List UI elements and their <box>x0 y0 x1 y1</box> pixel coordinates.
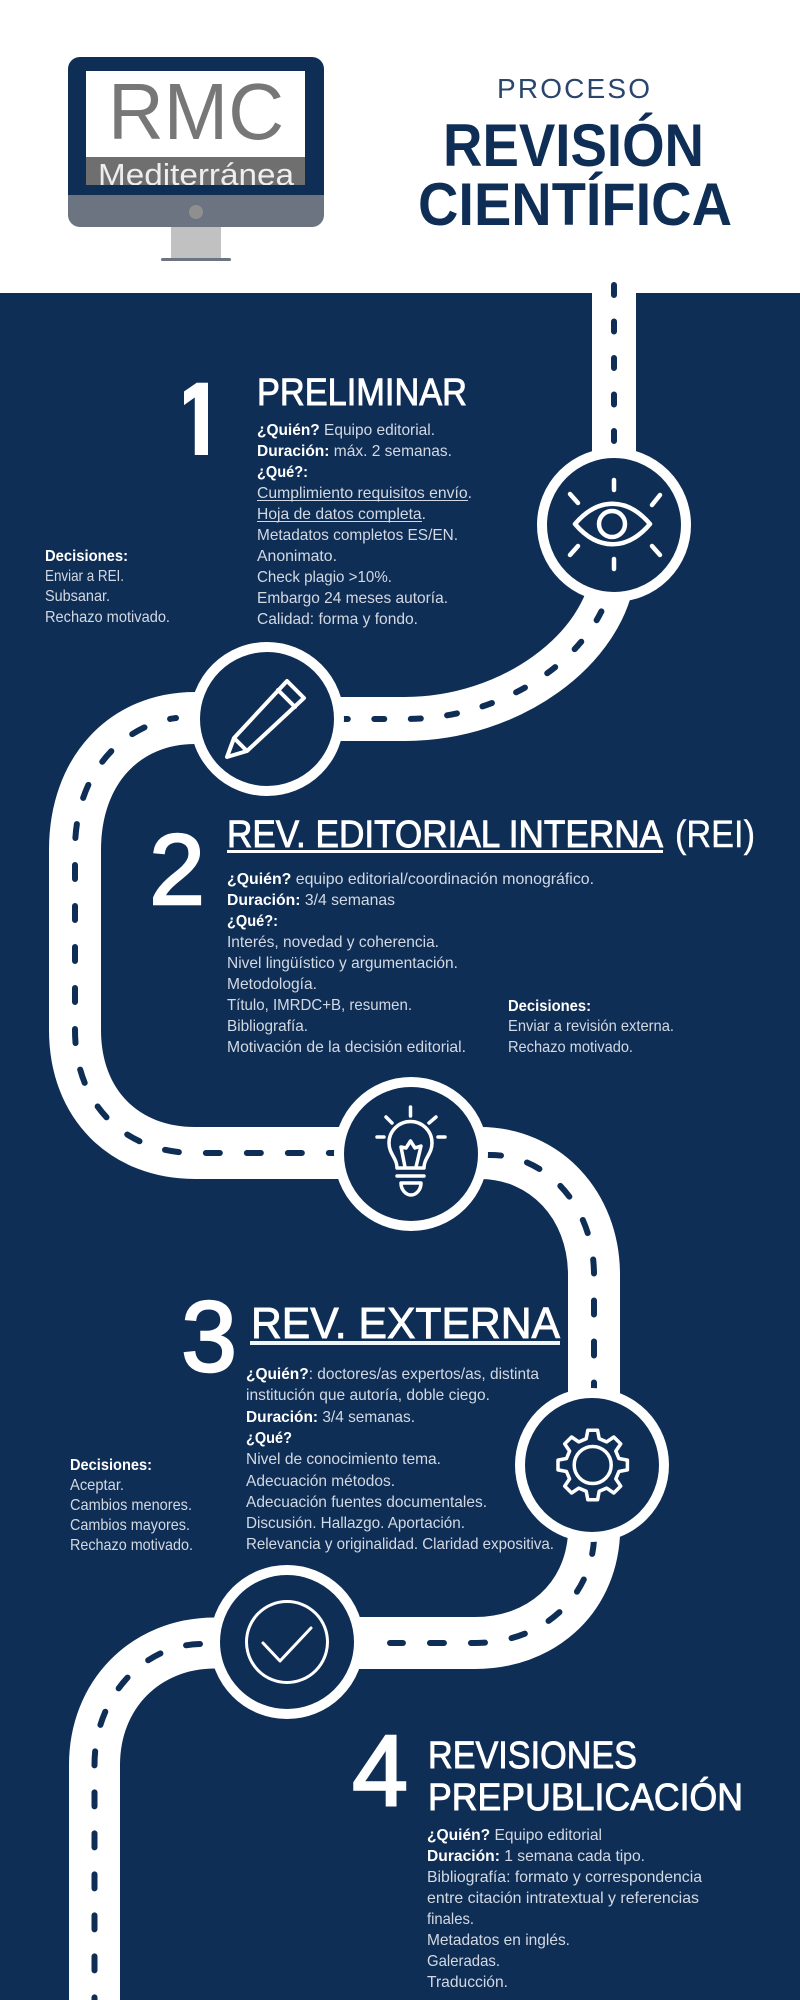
decisions: step 2: Rechazo motivado. <box>508 1039 633 1056</box>
body text: step 2: Metodología. <box>227 976 317 993</box>
body text: step 2: Título, IMRDC+B, resumen. <box>227 997 412 1014</box>
heading: rev. editorial interna: (REI) <box>675 814 755 856</box>
body text: step 1: ¿Quién? Equipo editorial. <box>257 422 435 439</box>
body text: step 3 <box>246 1366 554 1553</box>
body text: step 3: Adecuación métodos. <box>246 1473 395 1490</box>
body text: step 2: Nivel lingüístico y argumentación. <box>227 955 458 972</box>
icon: gear <box>520 1393 664 1537</box>
icon: pencil <box>195 647 339 791</box>
panel: step 2 revisión editorial interna <box>149 814 755 1056</box>
body text: step 4: Galeradas. <box>427 1953 500 1970</box>
decisions: step 2 <box>508 998 674 1056</box>
decisions: step 3: Decisiones: <box>70 1457 152 1474</box>
heading: revisiones prepublicación: REVISIONES <box>428 1735 637 1777</box>
body text: step 3: Relevancia y originalidad. Claridad expositiva. <box>246 1536 554 1553</box>
heading: rev. editorial interna: REV. EDITORIAL INTERNA <box>227 814 664 856</box>
decisions: step 1: Enviar a REI. <box>45 568 124 585</box>
road: winding path <box>75 270 614 2000</box>
decisions: step 2: Decisiones: <box>508 998 591 1015</box>
decisions: step 1: Decisiones: <box>45 548 128 565</box>
panel: step 3 revisión externa <box>181 1281 561 1553</box>
body text: step 1: Metadatos completos ES/EN. <box>257 527 458 544</box>
body text: step 1: Embargo 24 meses autoría. <box>257 590 448 607</box>
number 4: 4 <box>352 1715 408 1827</box>
icon: eye <box>542 453 686 597</box>
number 1: 1 <box>166 358 233 494</box>
body text: step 4: Duración: 1 semana cada tipo. <box>427 1848 645 1865</box>
decisions: step 1: Subsanar. <box>45 588 110 605</box>
body text: step 3: ¿Qué? <box>246 1430 292 1447</box>
title <box>418 73 732 238</box>
panel: step 4 revisiones prepublicación <box>352 1715 743 1991</box>
body text: step 1: Check plagio >10%. <box>257 569 392 586</box>
decisions: step 1 <box>45 548 170 626</box>
number 3: 3 <box>181 1281 237 1393</box>
body text: step 1: Calidad: forma y fondo. <box>257 611 418 628</box>
body text: step 1: Duración: máx. 2 semanas. <box>257 443 452 460</box>
body text: step 3: Discusión. Hallazgo. Aportación. <box>246 1515 465 1532</box>
title: CIENTÍFICA <box>418 171 732 238</box>
logo: RMC Mediterránea monitor: Mediterránea <box>98 157 295 192</box>
body text: step 3: Nivel de conocimiento tema. <box>246 1451 441 1468</box>
logo: RMC Mediterránea monitor: RMC <box>108 67 284 156</box>
body text: step 3: institución que autoría, doble ciego. <box>246 1387 490 1404</box>
body text: step 3: Duración: 3/4 semanas. <box>246 1409 415 1426</box>
body text: step 1: ¿Qué?: <box>257 464 308 481</box>
icon: light bulb <box>339 1082 483 1226</box>
body text: step 2: Duración: 3/4 semanas <box>227 892 395 909</box>
heading: preliminar: PRELIMINAR <box>257 372 467 414</box>
decisions: step 3: Rechazo motivado. <box>70 1537 193 1554</box>
body text: step 2: Bibliografía. <box>227 1018 308 1035</box>
body text: step 4: ¿Quién? Equipo editorial <box>427 1827 602 1844</box>
body text: step 2: Motivación de la decisión editorial. <box>227 1039 466 1056</box>
body text: step 3: ¿Quién?: doctores/as expertos/as, distinta <box>246 1366 539 1383</box>
heading: revisiones prepublicación: PREPUBLICACIÓN <box>428 1776 743 1819</box>
decisions: step 2: Enviar a revisión externa. <box>508 1018 674 1035</box>
body text: step 4: Traducción. <box>427 1974 508 1991</box>
title: REVISIÓN <box>443 112 704 179</box>
heading: rev. externa: REV. EXTERNA <box>251 1299 561 1348</box>
body text: step 2: ¿Qué?: <box>227 913 278 930</box>
body text: step 3: Adecuación fuentes documentales. <box>246 1494 487 1511</box>
title: PROCESO <box>497 73 650 104</box>
body text: step 2: ¿Quién? equipo editorial/coordinación monográfico. <box>227 871 594 888</box>
icon: check mark <box>215 1570 359 1714</box>
number 2: 2 <box>149 814 205 926</box>
decisions: step 3 <box>70 1457 193 1554</box>
decisions: step 3: Cambios menores. <box>70 1497 192 1514</box>
body text: step 2: Interés, novedad y coherencia. <box>227 934 439 951</box>
body text: step 1: Hoja de datos completa. <box>257 506 426 523</box>
body text: step 4: Metadatos en inglés. <box>427 1932 570 1949</box>
heading: revisiones prepublicación <box>428 1735 743 1819</box>
body text: step 1: Cumplimiento requisitos envío. <box>257 485 472 502</box>
body text: step 4: entre citación intratextual y referencias <box>427 1890 699 1907</box>
decisions: step 3: Aceptar. <box>70 1477 124 1494</box>
decisions: step 1: Rechazo motivado. <box>45 609 170 626</box>
body text: step 2 <box>227 871 594 1056</box>
body text: step 1: Anonimato. <box>257 548 337 565</box>
body text: step 4: finales. <box>427 1911 474 1928</box>
body text: step 1 <box>257 422 472 628</box>
logo: RMC Mediterránea monitor <box>68 57 324 261</box>
body text: step 4: Bibliografía: formato y correspondencia <box>427 1869 702 1886</box>
body text: step 4 <box>427 1827 702 1991</box>
decisions: step 3: Cambios mayores. <box>70 1517 190 1534</box>
panel: step 1 preliminar <box>184 378 471 628</box>
